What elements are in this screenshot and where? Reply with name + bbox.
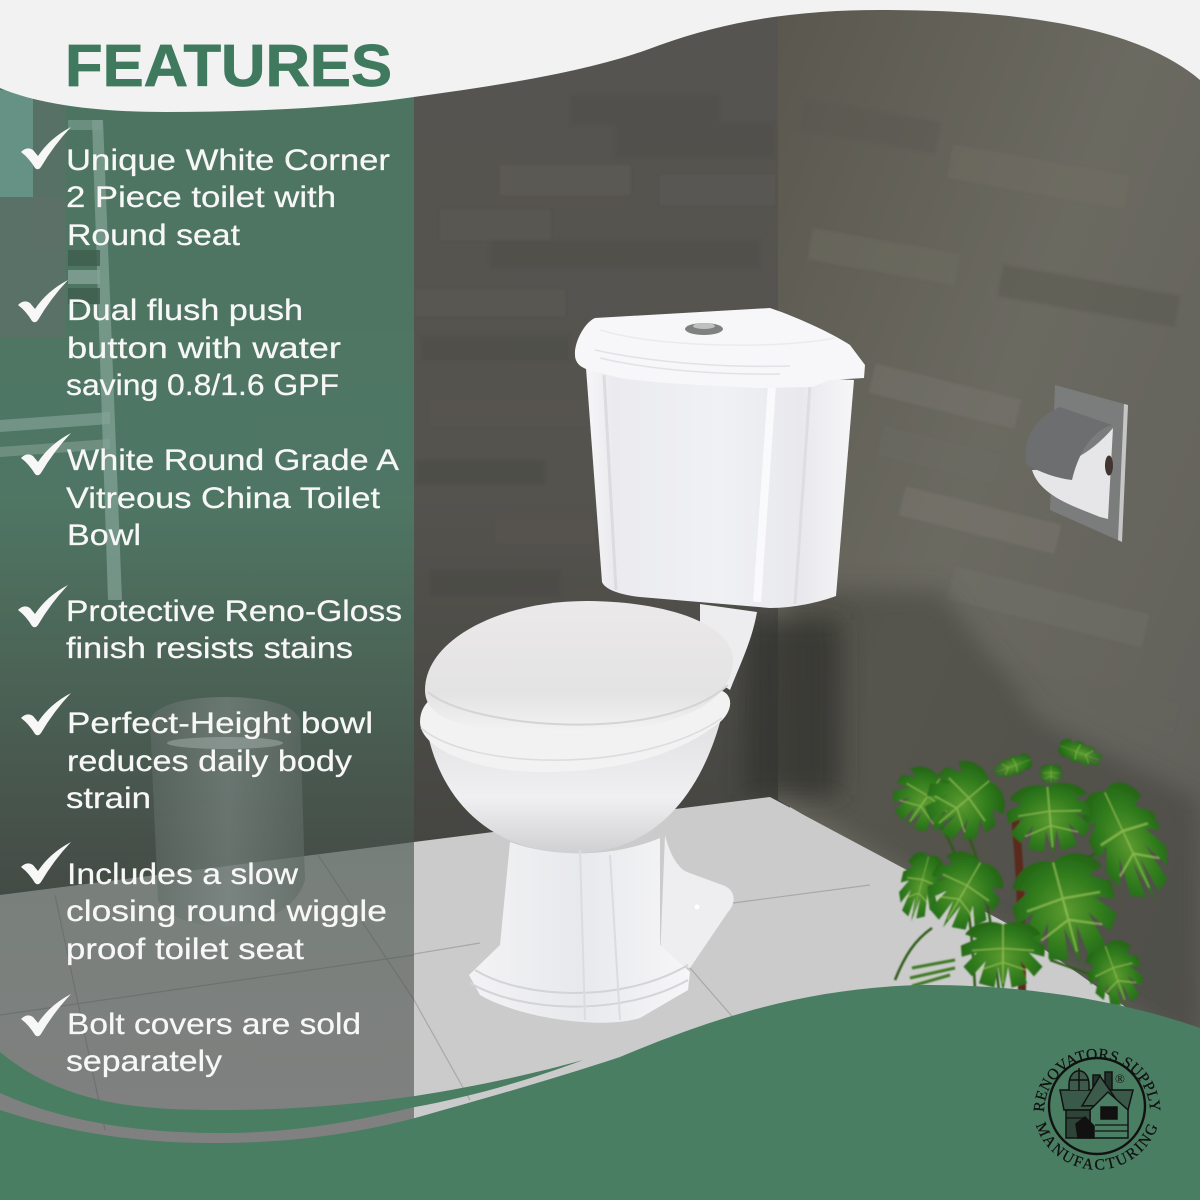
rim bbox=[420, 690, 730, 772]
feature 6 text: closing round wiggle bbox=[66, 895, 387, 928]
feature 6 text: Includes a slow bbox=[67, 858, 299, 891]
feature 1 text: Round seat bbox=[67, 219, 240, 252]
logo bottom text: MANUFACTURING bbox=[1036, 1121, 1157, 1170]
potted plant bbox=[879, 735, 1188, 1017]
right wall bbox=[778, 0, 1200, 1060]
feature 7 text: separately bbox=[66, 1045, 222, 1078]
rear foot bbox=[660, 835, 734, 968]
icon: check bbox=[21, 693, 71, 735]
feature 3 text: Vitreous China Toilet bbox=[66, 482, 380, 515]
icon: check bbox=[21, 127, 71, 169]
floor joints bbox=[0, 855, 870, 1130]
wall tiles bbox=[415, 95, 1180, 734]
title: FEATURES bbox=[65, 33, 392, 99]
icon: check bbox=[18, 280, 68, 322]
feature 7 text bbox=[66, 1008, 361, 1078]
icon: check bbox=[21, 842, 71, 884]
feature 2 text: button with water bbox=[67, 332, 341, 365]
feature 2 bbox=[18, 280, 341, 402]
feature 4 text bbox=[66, 595, 402, 665]
feature 6 bbox=[21, 842, 387, 966]
logo registered mark: ® bbox=[1115, 1071, 1125, 1086]
feature 1 text: Unique White Corner bbox=[66, 144, 390, 177]
feature 2 text: Dual flush push bbox=[67, 294, 303, 327]
towel and ladder behind panel bbox=[0, 90, 122, 600]
floor bbox=[0, 797, 1200, 1200]
feature 6 text: proof toilet seat bbox=[66, 933, 304, 966]
feature 5 text: reduces daily body bbox=[67, 745, 352, 778]
bottom green sliver bbox=[0, 1052, 583, 1133]
toilet bbox=[420, 308, 865, 1023]
feature 6 text bbox=[66, 858, 387, 966]
bowl bbox=[428, 715, 722, 853]
feature 4 text: Protective Reno-Gloss bbox=[66, 595, 402, 628]
plant stem bbox=[1015, 815, 1022, 1000]
toilet paper holder bbox=[1026, 385, 1128, 542]
trash bin behind panel bbox=[150, 697, 305, 926]
logo ring bbox=[1049, 1058, 1145, 1154]
icon: check bbox=[18, 585, 68, 627]
feature list bbox=[18, 127, 402, 1078]
tank connector bbox=[700, 604, 757, 690]
corner and lower wall shadow bbox=[790, 590, 1200, 1050]
plant branches bbox=[895, 820, 1120, 1000]
feature 3 text bbox=[66, 444, 399, 552]
feature 3 text: White Round Grade A bbox=[67, 444, 399, 477]
feature 5 text: Perfect-Height bowl bbox=[67, 707, 373, 740]
pedestal bbox=[469, 838, 690, 1023]
feature 5 bbox=[21, 693, 373, 815]
feature 1 text bbox=[66, 144, 390, 252]
tank lid bbox=[575, 308, 865, 388]
feature 4 bbox=[18, 585, 402, 665]
left translucent text panel bbox=[0, 60, 414, 1150]
feature 1 text: 2 Piece toilet with bbox=[66, 181, 336, 214]
icon: check bbox=[21, 994, 71, 1036]
logo top text: RENOVATORS SUPPLY bbox=[1034, 1048, 1160, 1112]
tank body bbox=[586, 368, 854, 608]
feature 1 bbox=[21, 127, 390, 252]
left wall bbox=[0, 0, 790, 900]
seat bbox=[425, 601, 733, 733]
feature 3 text: Bowl bbox=[67, 519, 141, 552]
logo: Renovators Supply Manufacturing bbox=[1034, 1048, 1160, 1170]
lid ridges bbox=[600, 330, 835, 345]
feature 5 text bbox=[66, 707, 373, 815]
feature 4 text: finish resists stains bbox=[66, 632, 353, 665]
flush button bbox=[685, 323, 723, 335]
feature 5 text: strain bbox=[66, 782, 151, 815]
icon: check bbox=[21, 433, 71, 475]
logo house drawing bbox=[1060, 1068, 1133, 1138]
top white wave bbox=[0, 0, 1200, 112]
feature 7 text: Bolt covers are sold bbox=[67, 1008, 361, 1041]
feature 2 text: saving 0.8/1.6 GPF bbox=[66, 369, 339, 402]
feature 3 bbox=[21, 433, 399, 552]
plant small fronds bbox=[910, 960, 955, 986]
plant leaves bbox=[1079, 935, 1153, 1017]
feature 7 bbox=[21, 994, 361, 1078]
bottom green wave bbox=[0, 985, 1200, 1200]
feature 2 text bbox=[66, 294, 341, 402]
